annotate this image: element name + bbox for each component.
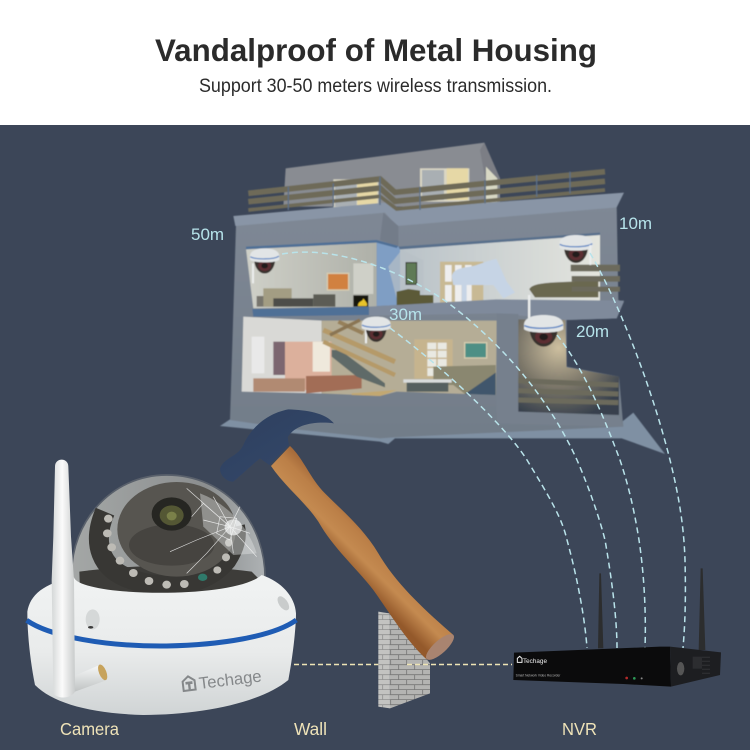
antenna connector [74,663,109,692]
distance label: 20m: 20m [576,322,609,341]
distance label: 10m: 10m [619,214,652,233]
handle end cap [422,630,458,664]
armchair [397,289,433,305]
cracked glass [170,488,257,573]
grand piano [452,259,515,303]
lower room [242,317,497,396]
wireless signal paths [282,252,685,648]
camera: 50m position [250,248,279,283]
blue stripe [27,620,296,646]
screw recesses [86,594,291,629]
NVR antennas [598,568,705,650]
status LEDs [625,677,643,680]
camera housing [27,575,296,715]
kitchen cabinets [252,337,362,393]
rear connector [677,662,684,675]
mid floor slab right [369,299,624,320]
rear vent [693,657,710,673]
french door [440,262,483,303]
house: ground slab [220,413,665,454]
NVR brand text: Techage [523,658,547,665]
camera dome [72,475,265,596]
IR LEDs [103,515,232,589]
camera: 10m position [559,235,593,265]
distance label: 30m: 30m [389,305,422,324]
porch railing [518,381,618,403]
Techage logo: Techage [198,666,263,693]
antenna [52,460,75,697]
NVR logo icon [517,656,522,662]
lower head plate [129,524,214,566]
framed picture [406,263,417,284]
hammer [220,409,458,664]
NVR model text: Smart Network Video Recorder [516,672,561,677]
illustration: house cutaway [220,143,665,454]
title: Vandalproof of Metal Housing [155,32,597,68]
subtitle: Support 30-50 meters wireless transmission. [199,75,552,97]
camera: 30m position [362,317,391,343]
NVR recorder [513,568,721,687]
balcony railing [571,265,620,292]
NVR front panel [513,647,671,687]
camera interior base [79,566,263,596]
hammer handle [271,446,453,659]
house: roof railing [248,172,605,210]
sofa [257,296,273,307]
wall painting [327,273,349,290]
porch nook [518,319,619,415]
distance label: 50m: 50m [191,225,224,244]
label: Wall: Wall [294,719,327,739]
connection to wall dashed line [294,664,512,666]
staircase [323,320,395,387]
teal painting [465,343,487,358]
entry column [497,313,623,427]
upper left room [246,240,400,308]
NVR side panel [670,647,721,687]
house: main facade [230,207,624,438]
security camera [27,460,296,715]
white header background [0,0,750,125]
door [414,339,453,379]
LED ring [99,512,236,586]
upper right room [388,233,600,305]
camera head ball [117,482,236,577]
house: upper storey block [283,143,500,208]
hammer head [220,409,334,482]
wall panels [353,263,373,294]
house: roof ledge [233,193,624,226]
sofa [529,281,598,297]
sofa set [433,365,496,394]
camera: 20m position [524,295,563,347]
lens [152,497,192,531]
label: Camera: Camera [60,719,119,739]
mid floor slab [252,307,369,317]
wall front dash [407,664,430,666]
house: front corner shading [380,213,398,247]
brick wall [378,612,430,708]
label: NVR: NVR [562,719,597,739]
fireplace [353,295,368,307]
